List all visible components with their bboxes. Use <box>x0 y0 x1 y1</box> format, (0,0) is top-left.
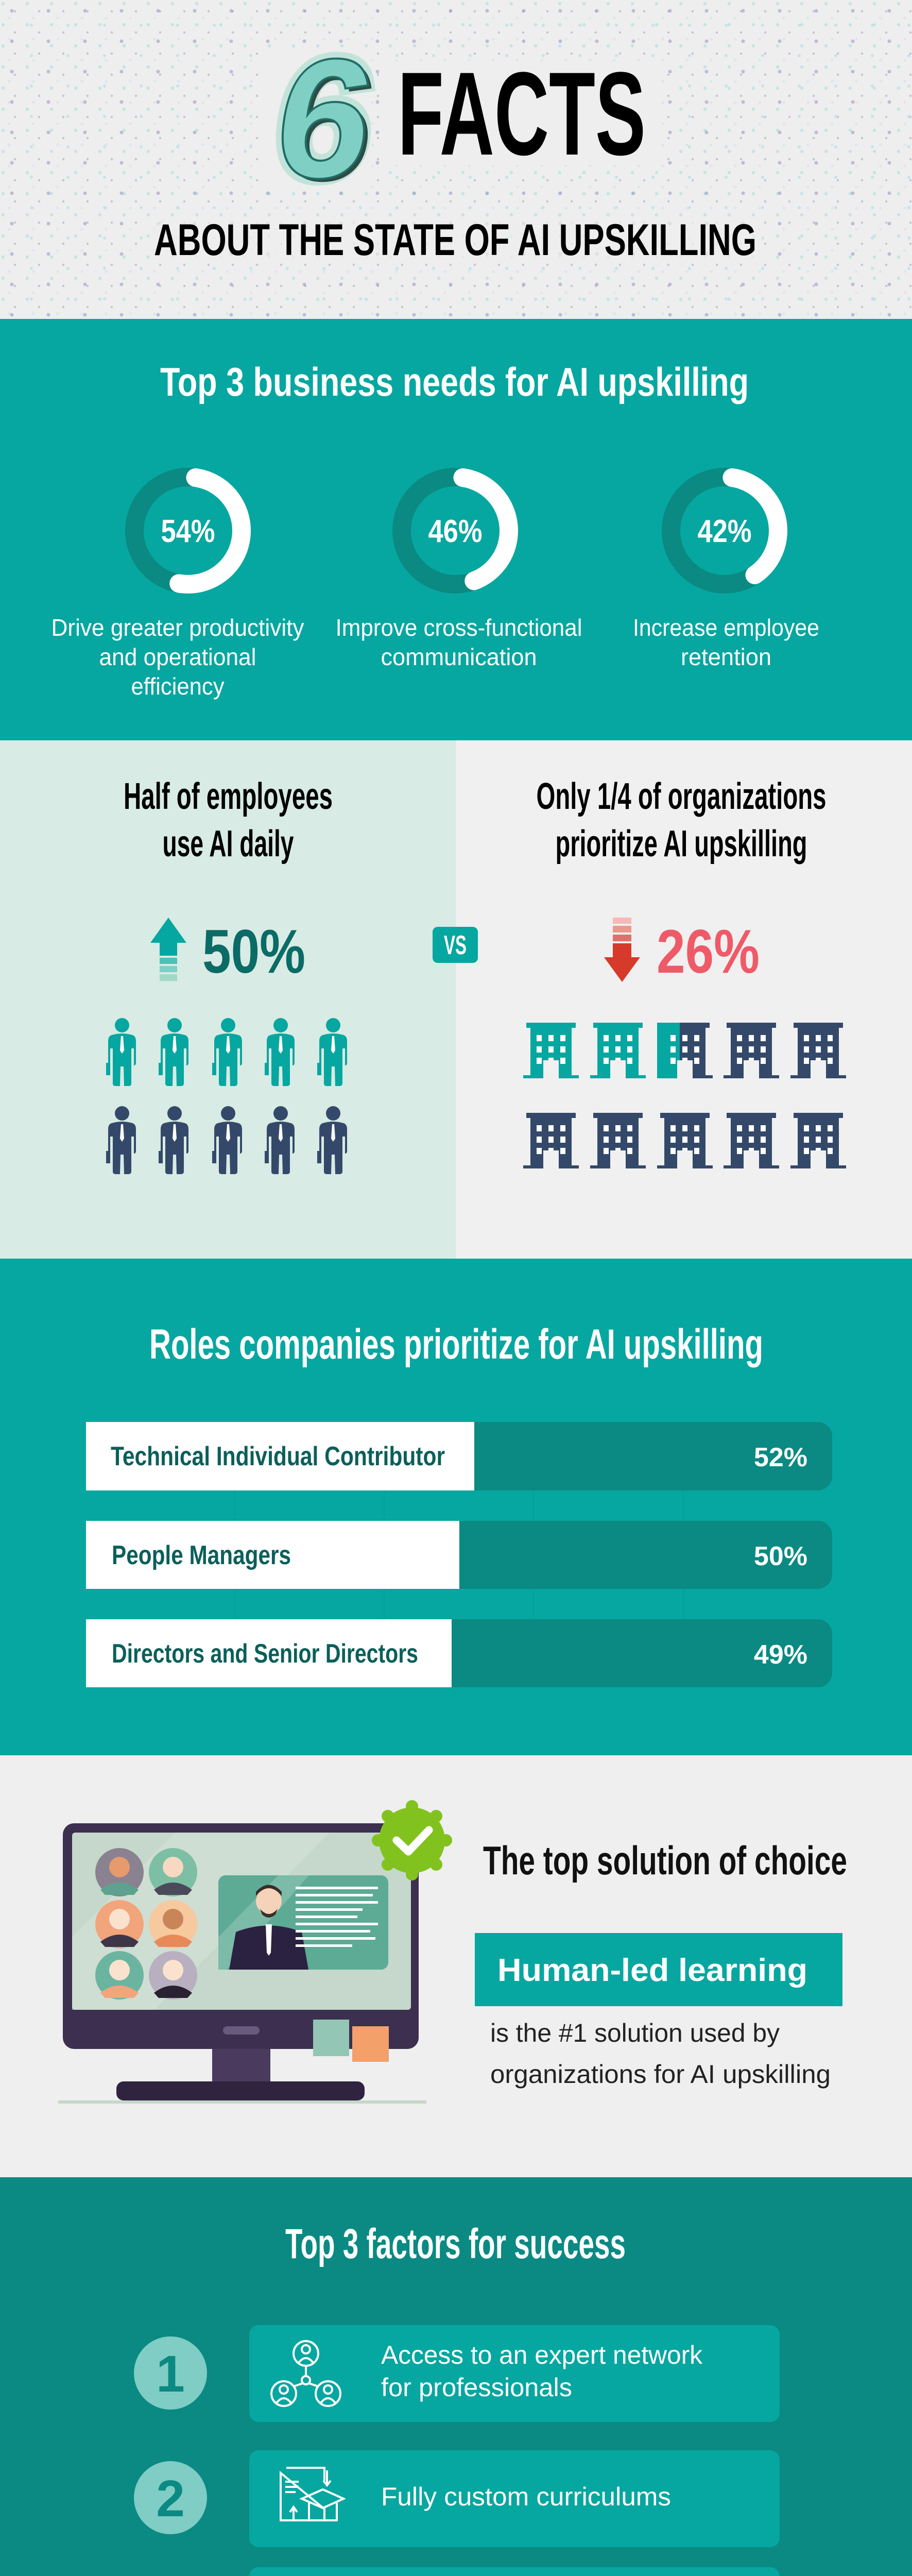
factor 2: Fully custom curriculums <box>381 2482 671 2511</box>
text: solution description: is the #1 solution used by <box>490 2019 780 2047</box>
panel: factors for success <box>0 2177 912 2576</box>
presenter panel <box>218 1875 388 1970</box>
illustration: monitor <box>58 1823 426 2104</box>
panel: comparison <box>0 740 912 1259</box>
heading: half of employees <box>124 776 333 865</box>
donut: 42% <box>664 470 785 591</box>
title: 6 FACTS <box>263 24 659 217</box>
text: solution description <box>490 2019 831 2089</box>
stat: 26%: 26% <box>657 917 760 986</box>
bar: directors 49% <box>86 1619 832 1687</box>
heading: factors: Top 3 factors for success <box>285 2221 626 2267</box>
donut: 46%: 46% <box>428 514 482 549</box>
panel: top solution <box>0 1755 912 2177</box>
bar: directors 49%: Directors and Senior Directors <box>112 1639 418 1669</box>
label: retention: retention <box>681 643 771 670</box>
bar: directors 49%: 49% <box>754 1640 807 1670</box>
panel: top 3 business needs <box>0 319 912 740</box>
vs badge: VS <box>444 930 467 960</box>
vs badge <box>433 927 478 963</box>
heading: business needs: Top 3 business needs for AI upskilling <box>160 359 749 404</box>
factor 2: 2 <box>156 2470 185 2528</box>
heading: 1/4 organizations <box>537 776 826 865</box>
heading: half of employees: use AI daily <box>163 823 294 865</box>
bar: technical IC 52%: Technical Individual Contributor <box>111 1442 445 1471</box>
label: communication: communication <box>381 643 537 670</box>
donut: 54%: 54% <box>161 514 215 549</box>
callout: human-led learning: Human-led learning <box>497 1953 807 1988</box>
label: productivity: efficiency <box>131 673 225 700</box>
text: solution description: organizations for AI upskilling <box>490 2060 831 2089</box>
donut: 42%: 42% <box>697 514 752 549</box>
label: communication <box>336 614 582 670</box>
icon: curriculum <box>281 2468 343 2520</box>
icon: network <box>271 2341 340 2406</box>
title: 6 FACTS: FACTS <box>398 47 646 180</box>
callout: human-led learning <box>475 1933 842 2006</box>
label: productivity <box>51 614 304 700</box>
icon: check badge <box>372 1800 452 1880</box>
factor 3 <box>134 2567 780 2576</box>
donut: 54% <box>128 470 248 591</box>
bar: people managers 50%: People Managers <box>112 1540 291 1570</box>
factor 1: 1 <box>156 2345 185 2403</box>
bar: technical IC 52% <box>86 1422 832 1490</box>
avatars <box>95 1848 197 1999</box>
factor 1: Access to an expert network <box>381 2341 703 2369</box>
label: retention <box>633 614 819 670</box>
building icons <box>523 1023 846 1169</box>
people icons <box>106 1018 347 1174</box>
bar: people managers 50%: 50% <box>754 1541 807 1571</box>
title: 6 FACTS: 6 <box>265 24 386 214</box>
factor 1: for professionals <box>381 2373 572 2402</box>
label: communication: Improve cross-functional <box>336 614 582 641</box>
title: 6 FACTS: 6 <box>265 24 386 214</box>
label: productivity: and operational <box>99 643 256 670</box>
factor 1 <box>134 2325 780 2422</box>
panel: roles <box>0 1259 912 1755</box>
heading: half of employees: Half of employees <box>124 776 333 817</box>
donut: 46% <box>395 470 515 591</box>
title: 6 FACTS: 6 <box>268 27 389 217</box>
icon: up arrow <box>150 918 186 981</box>
stat: 50%: 50% <box>202 917 305 986</box>
bar: technical IC 52%: 52% <box>754 1443 807 1472</box>
label: retention: Increase employee <box>633 614 819 641</box>
icon: down arrow <box>604 918 640 982</box>
bar: people managers 50% <box>86 1521 832 1589</box>
header background <box>0 0 912 319</box>
factor 2 <box>134 2450 780 2547</box>
label: productivity: Drive greater productivity <box>51 614 304 641</box>
